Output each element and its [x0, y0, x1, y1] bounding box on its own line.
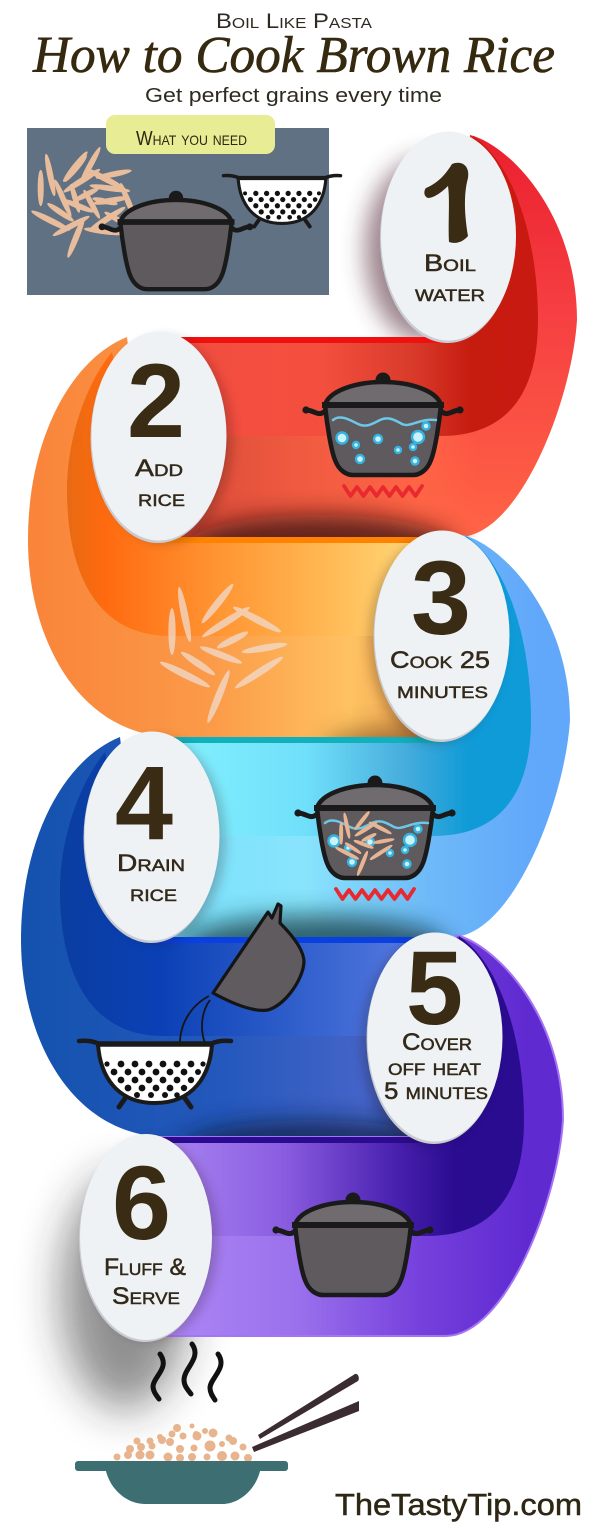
step 3 oval: Cook 25 — [390, 647, 490, 674]
title: How to Cook Brown Rice — [32, 27, 555, 84]
shadow of oval 1 — [365, 158, 485, 342]
step 4 oval — [84, 732, 220, 943]
step 1 oval: Boil — [424, 250, 476, 277]
step 1 oval — [380, 132, 516, 343]
subtitle: Get perfect grains every time — [145, 85, 442, 107]
step 3 oval — [374, 530, 510, 742]
icon: rice bowl — [75, 1424, 288, 1504]
step 4 oval: Drain — [117, 850, 185, 877]
step 3 oval: minutes — [397, 677, 488, 704]
brand: TheTastyTip.com — [335, 1487, 582, 1522]
panel: red band step 1 — [180, 135, 577, 537]
step 4 oval: rice — [130, 880, 177, 907]
panel: light blue band step 3 — [174, 535, 570, 937]
title: overline: Boil Like Pasta — [216, 10, 372, 33]
step 6 oval: Serve — [112, 1283, 180, 1310]
panel: orange band step 2 — [28, 337, 420, 737]
shadow of oval 6 — [61, 1174, 189, 1410]
icon: chopsticks — [252, 1374, 359, 1452]
step 6 oval: Fluff & — [104, 1254, 186, 1281]
step 1 oval: water — [415, 280, 485, 307]
icon: covered pot — [272, 1192, 434, 1295]
step 2 oval: Add — [135, 455, 183, 482]
step 4 oval: 4 — [115, 745, 173, 862]
step 3 oval: 3 — [411, 540, 471, 657]
heading tag: what you need: What you need — [136, 128, 247, 150]
step 5 oval — [366, 930, 502, 1144]
step 5 oval: 5 minutes — [384, 1078, 488, 1105]
icon: raw rice — [0, 0, 162, 273]
rice heap — [114, 1424, 252, 1462]
step 2 oval — [90, 332, 226, 543]
icon: rice grains — [158, 582, 288, 724]
heading tag: what you need — [106, 115, 275, 154]
step 6 oval — [79, 1134, 212, 1342]
step 5 oval: 5 — [406, 930, 463, 1047]
step 6 oval: 6 — [112, 1145, 171, 1262]
panel: what you need — [0, 0, 341, 295]
icon: boiling pot — [302, 372, 464, 496]
icon: pot — [99, 191, 253, 289]
icon: pot pouring into colander — [79, 904, 304, 1107]
icon: colander — [223, 175, 341, 227]
step 2 oval: 2 — [127, 343, 185, 460]
panel: purple band step 5 — [156, 935, 563, 1336]
icon: steam — [153, 1344, 221, 1400]
step 2 oval: rice — [138, 485, 185, 512]
step 5 oval: Cover — [402, 1029, 472, 1056]
step 5 oval: off heat — [388, 1054, 481, 1081]
panel: dark blue band step 4 — [21, 737, 416, 1136]
icon: pot with rice boiling — [294, 776, 456, 899]
oval shadows — [88, 338, 502, 1340]
